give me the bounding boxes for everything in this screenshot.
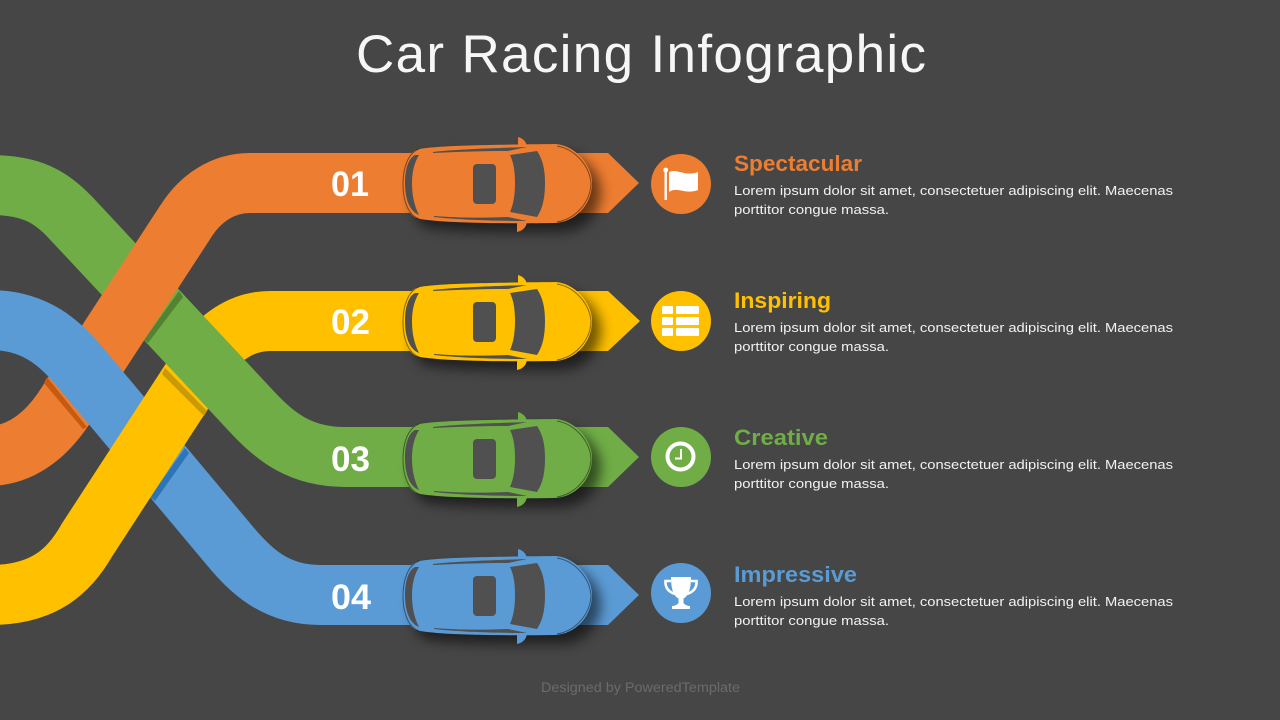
yellow shadow under green <box>162 368 207 416</box>
icon: trophy <box>651 563 711 623</box>
number 01: 01 <box>331 165 369 204</box>
text: description 1 <box>734 183 1173 217</box>
text: description 4: Lorem ipsum dolor sit amet, consectetuer adipiscing elit. Maecenas <box>734 594 1173 609</box>
orange shadow under blue <box>44 377 87 429</box>
orange ribbon lower part <box>0 221 186 456</box>
arrow tip 2 <box>608 291 640 351</box>
car 3 <box>403 412 601 507</box>
green ribbon <box>0 185 608 457</box>
item 1: Spectacular <box>331 137 1173 232</box>
text: description 2: porttitor congue massa. <box>734 339 889 354</box>
number 03: 03 <box>331 440 370 479</box>
item 3: Creative <box>331 412 1173 507</box>
blue ribbon <box>0 320 608 595</box>
arrow tip 1 <box>608 153 639 213</box>
text: description 3: Lorem ipsum dolor sit amet, consectetuer adipiscing elit. Maecenas <box>734 457 1173 472</box>
yellow ribbon <box>0 321 608 595</box>
heading: Creative: Creative <box>734 425 828 450</box>
arrow tip 3 <box>608 427 639 487</box>
title: Car Racing Infographic <box>356 25 926 84</box>
number 02: 02 <box>331 303 370 342</box>
text: description 3 <box>734 457 1173 491</box>
text: description 1: porttitor congue massa. <box>734 202 889 217</box>
orange ribbon upper part <box>68 183 608 402</box>
text: description 3: porttitor congue massa. <box>734 476 889 491</box>
heading: Inspiring: Inspiring <box>734 288 831 313</box>
text: description 2: Lorem ipsum dolor sit amet, consectetuer adipiscing elit. Maecenas <box>734 320 1173 335</box>
blue shadow under yellow <box>150 448 189 501</box>
woven ribbons <box>0 183 608 595</box>
heading: Spectacular: Spectacular <box>734 151 862 176</box>
item 2: Inspiring <box>331 275 1173 370</box>
number 04: 04 <box>331 578 372 617</box>
text: description 4 <box>734 594 1173 628</box>
arrow tip 4 <box>608 565 639 625</box>
heading: Impressive: Impressive <box>734 562 857 587</box>
item 4: Impressive <box>331 549 1173 644</box>
green shadow under orange <box>144 291 183 343</box>
text: description 2 <box>734 320 1173 354</box>
icon: clock <box>651 427 711 487</box>
car 1 <box>403 137 601 232</box>
footer credit: Designed by PoweredTemplate <box>541 680 740 695</box>
icon: list <box>651 291 711 351</box>
text: description 1: Lorem ipsum dolor sit amet, consectetuer adipiscing elit. Maecenas <box>734 183 1173 198</box>
car 2 <box>403 275 601 370</box>
text: description 4: porttitor congue massa. <box>734 613 889 628</box>
icon: flag <box>651 154 711 214</box>
car 4 <box>403 549 601 644</box>
